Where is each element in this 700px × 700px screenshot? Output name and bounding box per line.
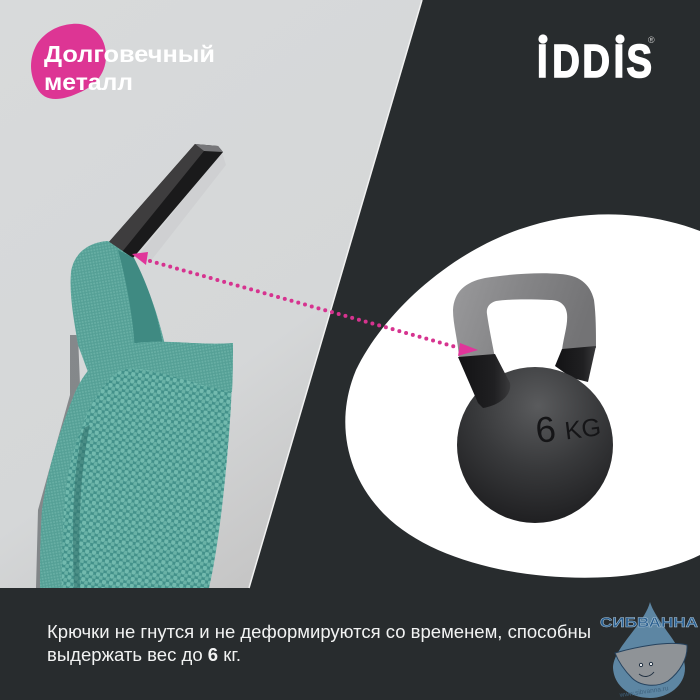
water drop <box>613 602 685 698</box>
body text: Крючки не гнутся и не деформируются со временем, способны <box>47 622 591 642</box>
panel: wall photo <box>0 0 422 588</box>
photo edge highlight <box>249 0 422 588</box>
metal hook <box>108 144 223 258</box>
towel shadow on wall <box>36 335 80 588</box>
towel hem band top <box>73 342 233 430</box>
logo: IDDIS: IDDIS <box>537 36 652 87</box>
heading: Долговечный <box>44 41 215 67</box>
hook with towel <box>36 144 233 588</box>
heading: металл <box>44 69 133 95</box>
heading <box>44 41 215 95</box>
kettlebell weight label: 6 <box>533 408 558 451</box>
kettlebell <box>453 273 613 523</box>
kettlebell ball <box>457 367 613 523</box>
kettlebell weight label <box>533 402 603 451</box>
towel fold shade <box>73 425 90 588</box>
pink accent circle <box>31 24 106 99</box>
dotted pointer arrow <box>132 252 478 356</box>
kettlebell handle <box>453 273 596 358</box>
towel hem band left <box>40 385 88 588</box>
body text <box>47 622 591 665</box>
kettlebell weight label: KG <box>563 413 602 445</box>
kettlebell right sleeve <box>555 346 596 382</box>
body text: выдержать вес до 6 кг. <box>47 645 241 665</box>
watermark url: www.sibvanna.ru <box>618 685 669 699</box>
wall shadow of the hook <box>136 152 226 262</box>
towel body <box>40 342 233 588</box>
white blob behind kettlebell <box>345 214 700 578</box>
towel loop <box>71 241 165 372</box>
watermark: sibvanna <box>600 602 698 699</box>
bathtub face <box>639 662 654 676</box>
bathtub <box>615 643 687 685</box>
watermark name: СИБВАННА <box>600 614 698 630</box>
kettlebell left sleeve <box>458 354 510 408</box>
logo: IDDIS: ® <box>648 35 655 45</box>
